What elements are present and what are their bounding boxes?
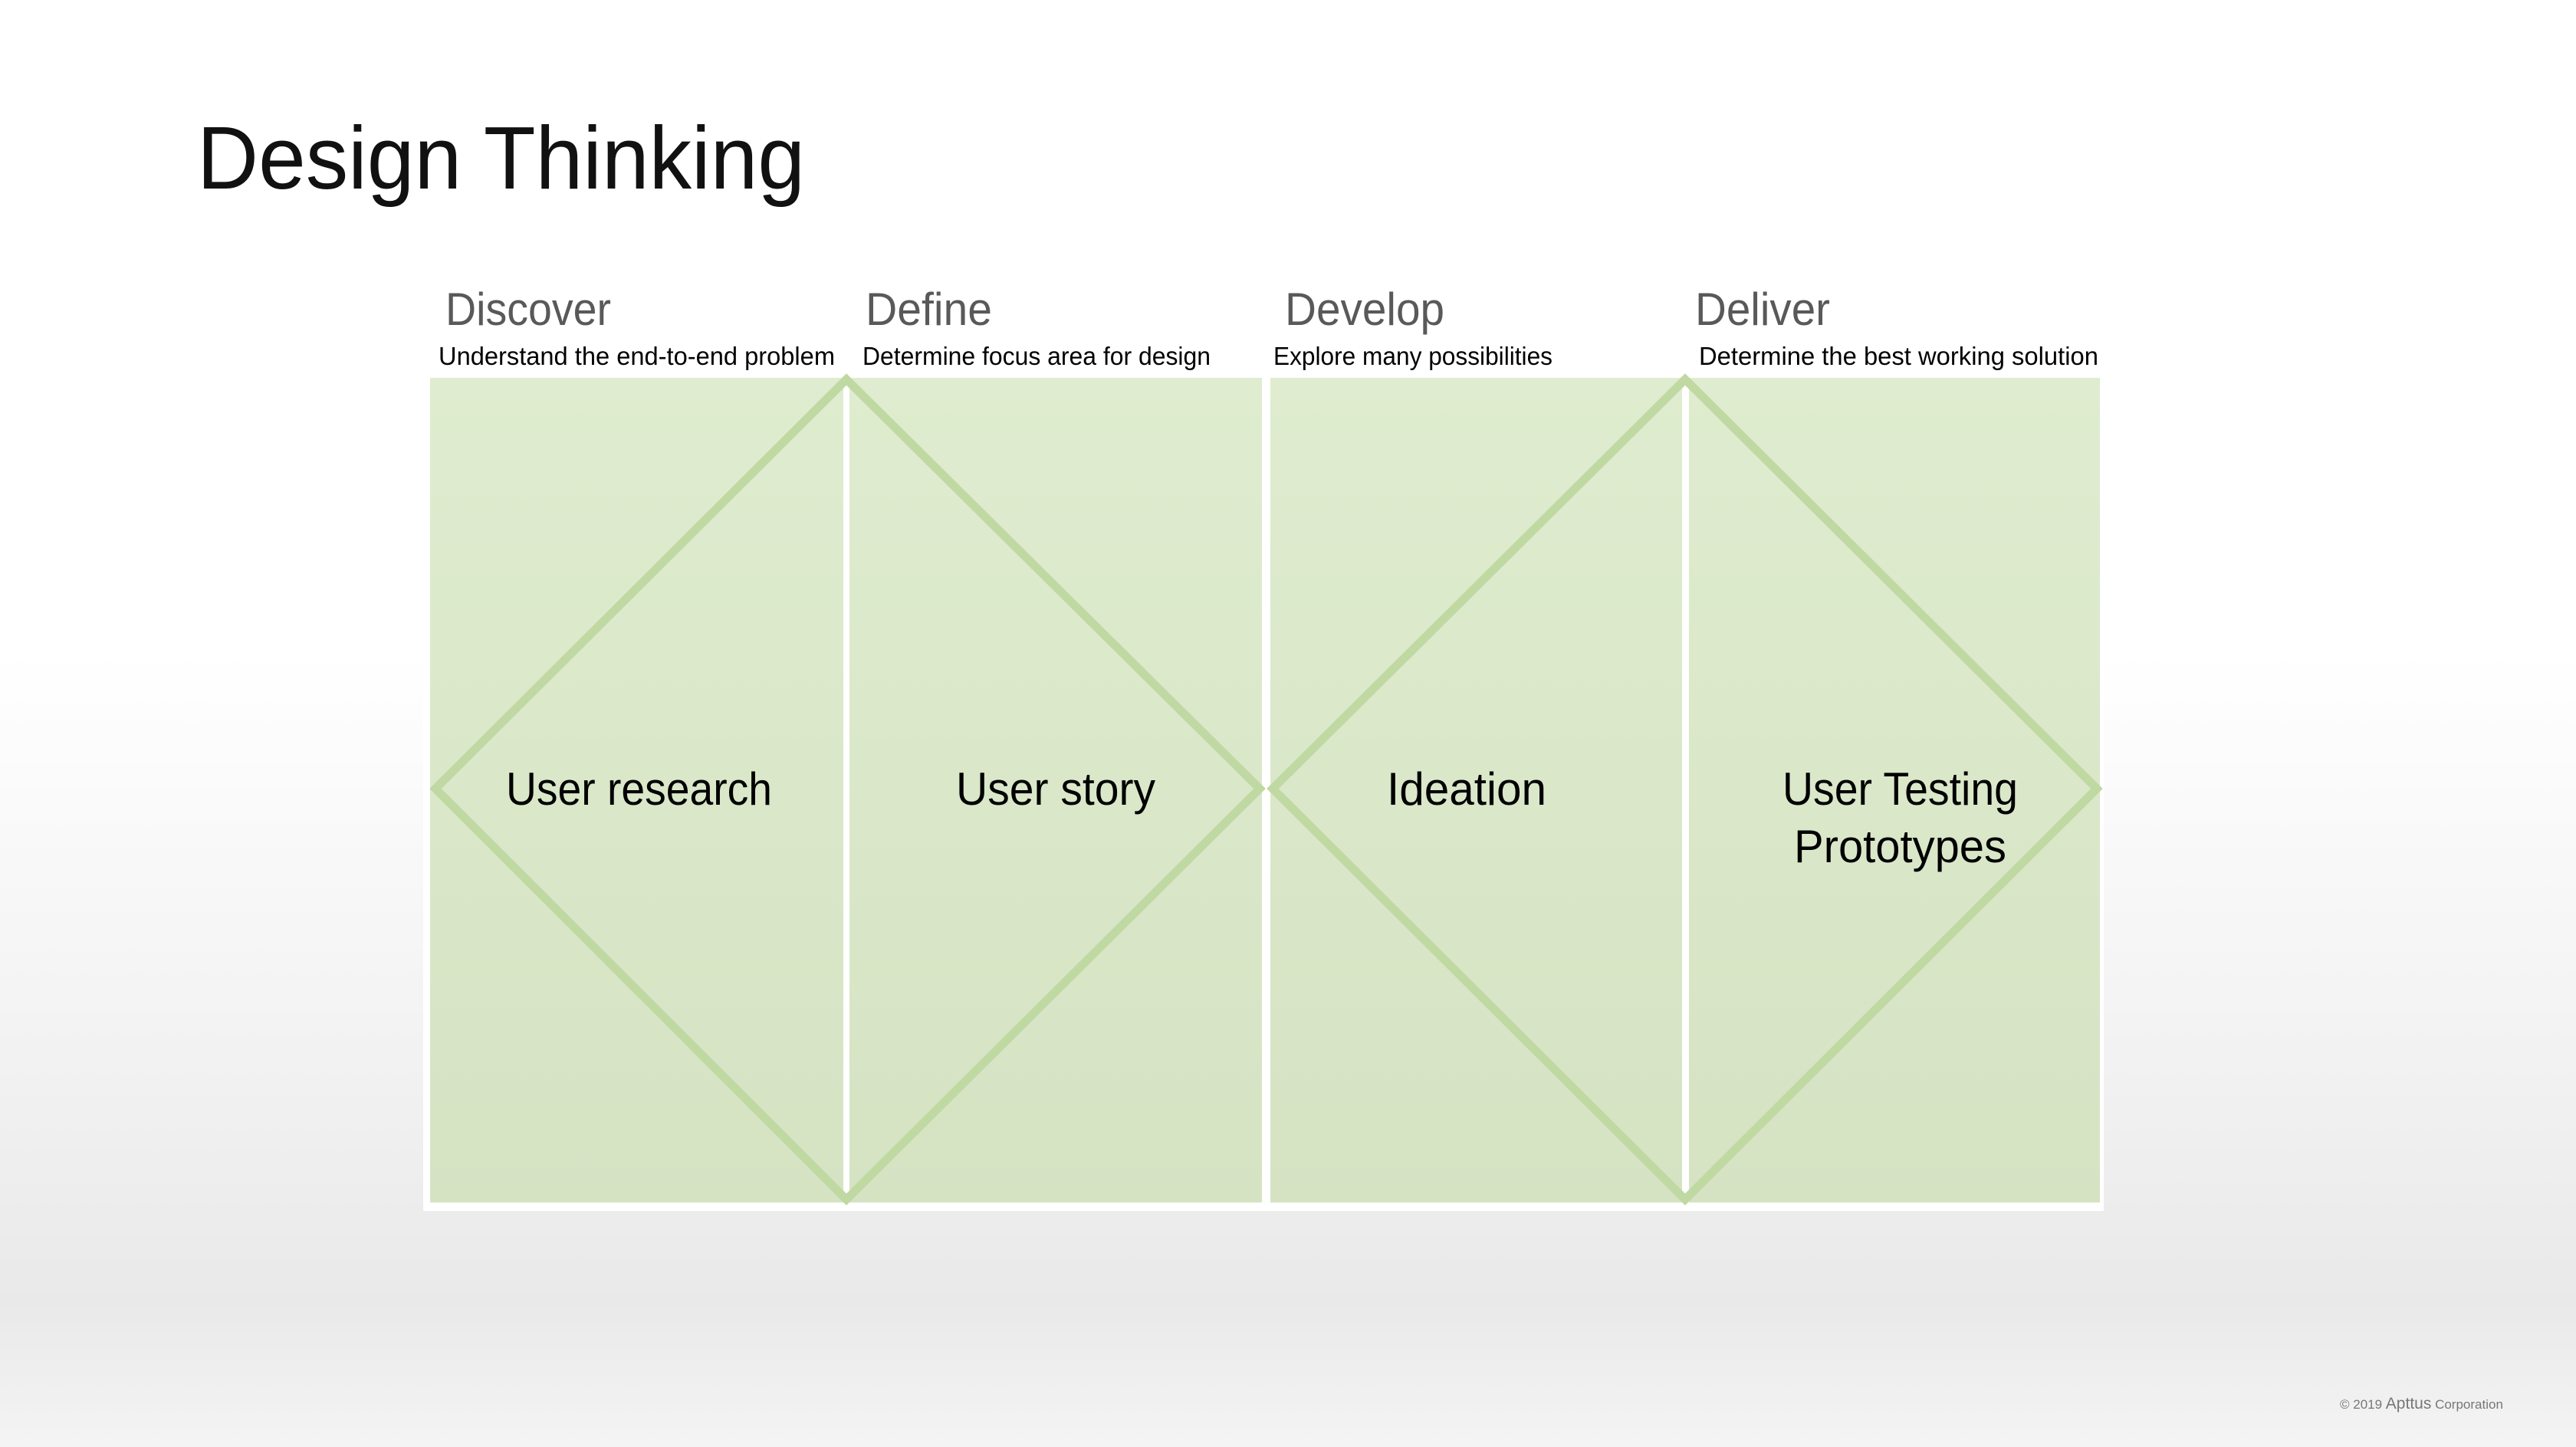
subtitle: discover: Understand the end-to-end problem <box>439 342 835 370</box>
subtitle: deliver: Determine the best working solution <box>1699 342 2098 370</box>
label: ideation: Ideation <box>1387 763 1546 815</box>
label: user testing prototypes <box>1783 763 2018 872</box>
heading: Define: Define <box>866 284 992 335</box>
label: user testing prototypes: User Testing <box>1783 763 2018 815</box>
panel frame <box>423 375 2104 1211</box>
panel: define <box>849 378 1262 1203</box>
heading: Develop: Develop <box>1285 284 1444 335</box>
panel: develop <box>1270 378 1682 1203</box>
label: user research: User research <box>506 763 772 815</box>
diamond: develop-deliver <box>1273 379 2097 1199</box>
panel: discover <box>430 378 843 1203</box>
subtitle: develop: Explore many possibilities <box>1273 342 1552 370</box>
label: user testing prototypes: Prototypes <box>1794 821 2006 872</box>
heading: Discover: Discover <box>445 284 611 335</box>
heading: Deliver: Deliver <box>1695 284 1830 335</box>
title: Design Thinking <box>197 108 805 208</box>
diamond: discover-define <box>435 379 1260 1199</box>
subtitle: define: Determine focus area for design <box>863 342 1211 370</box>
panel: deliver <box>1689 378 2100 1203</box>
footer: © 2019 Apttus Corporation <box>2340 1395 2503 1413</box>
label: user story: User story <box>956 763 1155 815</box>
